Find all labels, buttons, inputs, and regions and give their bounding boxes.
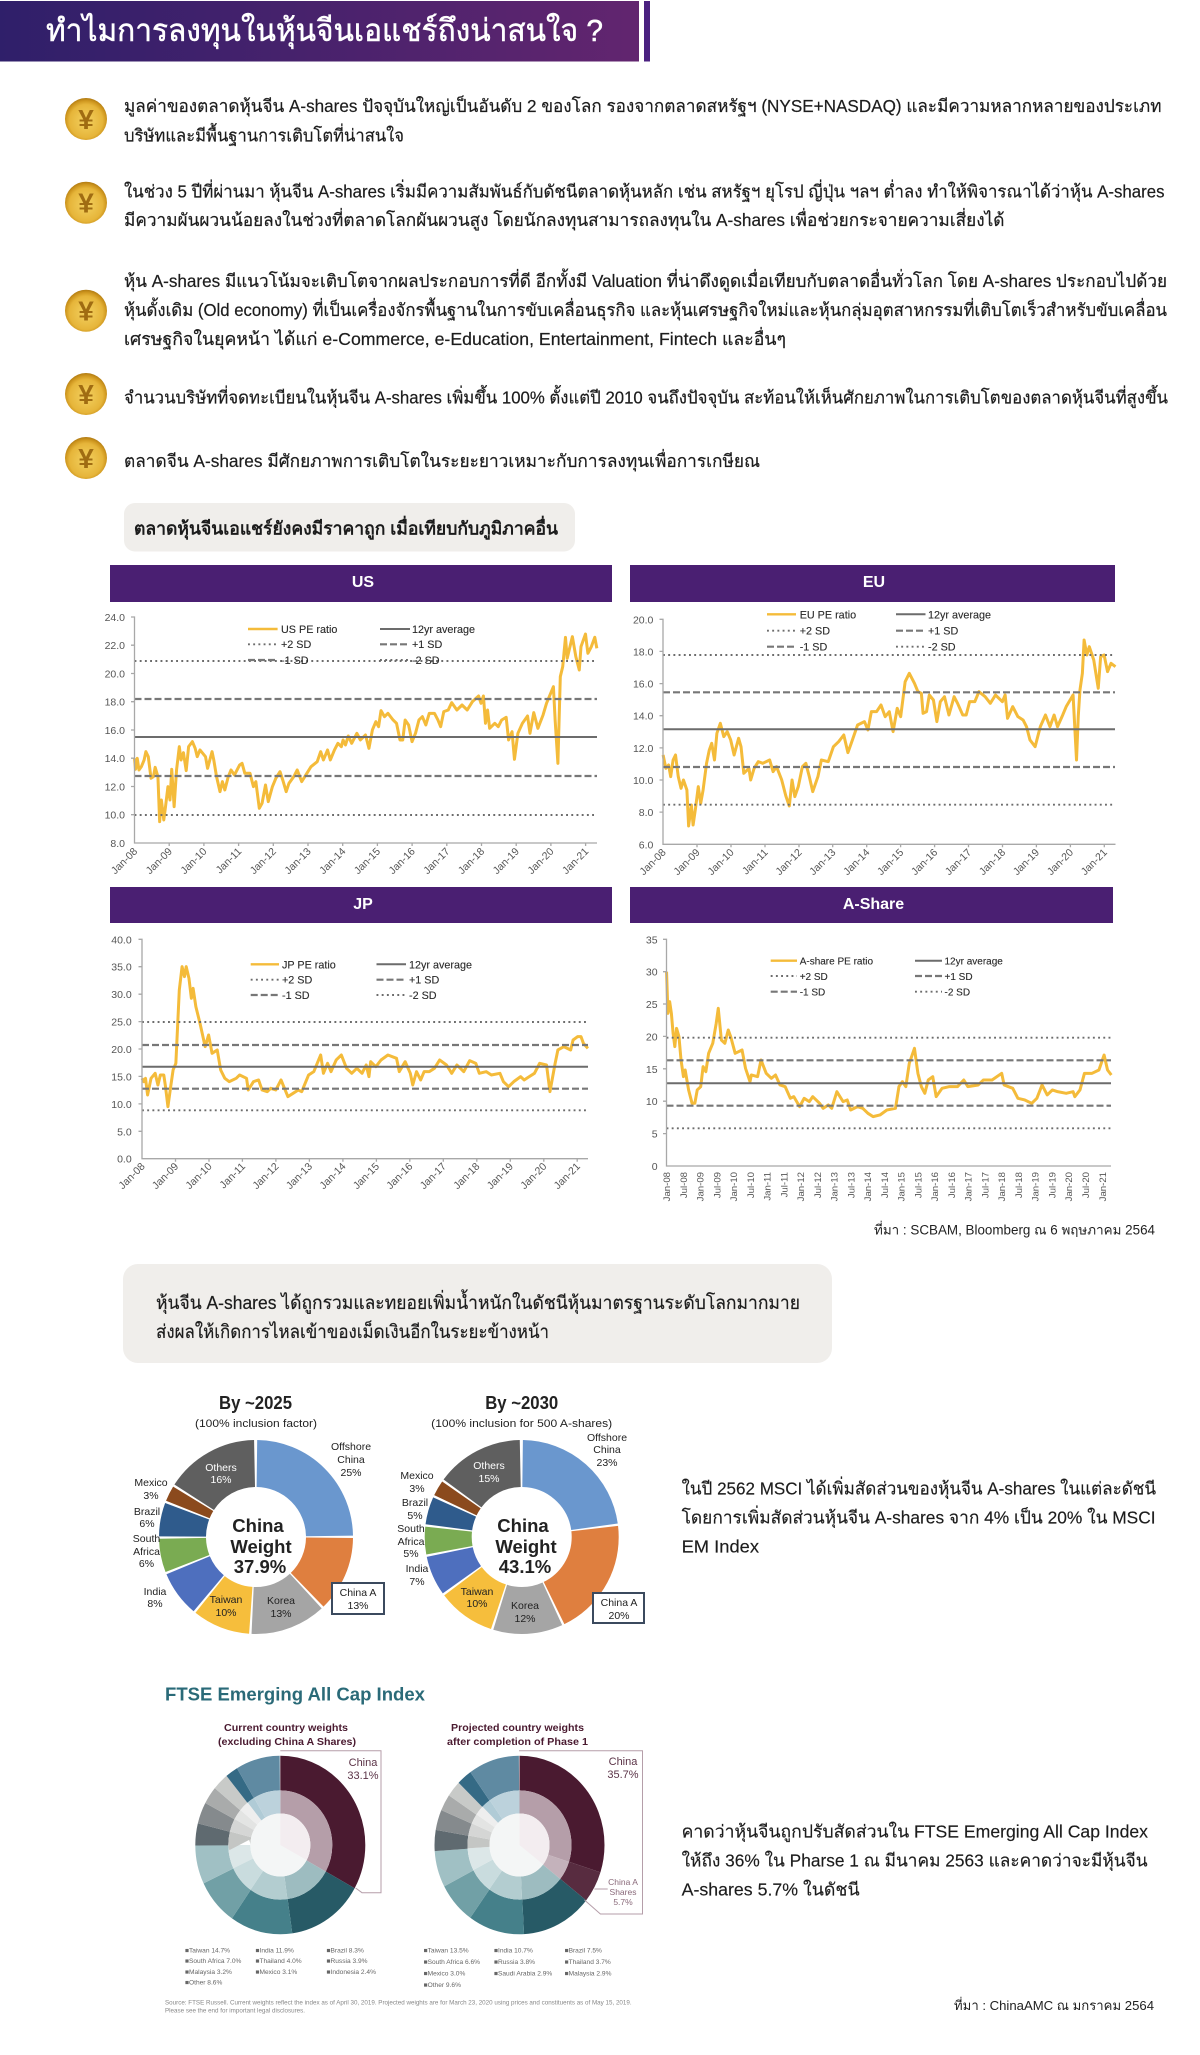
line chart: A-share PE ratio: Jan-21 (1098, 1172, 1109, 1201)
legend: US: -2 SD (412, 655, 440, 667)
legend: current weights: ■Malaysia 3.2% (185, 1969, 232, 1976)
China A label box: China A (601, 1597, 637, 1609)
slice labels: Offshore (331, 1441, 371, 1453)
text block: MSCI note: EM Index (682, 1536, 759, 1556)
slice labels: China (593, 1444, 621, 1456)
line chart: A-share PE ratio: Jul-16 (947, 1172, 958, 1198)
line chart: A-share PE ratio: Jul-20 (1081, 1172, 1092, 1198)
legend: US (248, 624, 475, 667)
slice labels: Africa (133, 1546, 160, 1558)
legend: EU: -2 SD (928, 642, 956, 654)
panel: US PE chart (105, 565, 612, 877)
legend: A-Share: +2 SD (800, 972, 828, 983)
legend: current weights (185, 1948, 376, 1986)
icon: yen coin 2: ¥ (78, 188, 94, 219)
line chart: EU PE ratio: Jan-10 (705, 847, 737, 878)
text block: FTSE note: ให้ถึง 36% ใน Pharse 1 ณ มีนาคม 2563 และคาดว่าจะมีหุ้นจีน (682, 1850, 1148, 1872)
line chart: A-share PE ratio: 25 (646, 999, 658, 1011)
line chart: EU PE ratio: Jan-17 (943, 847, 974, 878)
line chart: US PE ratio: 16.0 (105, 725, 125, 737)
line chart: JP PE ratio: Jan-20 (518, 1161, 550, 1192)
text block: FTSE note: A-shares 5.7% ในดัชนี (682, 1880, 860, 1900)
line chart: JP PE ratio: 0.0 (117, 1154, 132, 1166)
legend: projected weights: ■Brazil 7.5% (565, 1948, 602, 1954)
China A label box (332, 1583, 384, 1614)
line chart: US PE ratio: 24.0 (105, 612, 125, 624)
legend: JP: +1 SD (409, 975, 440, 987)
legend: EU: -1 SD (800, 642, 828, 654)
text block: MSCI note: ในปี 2562 MSCI ได้เพิ่มสัดส่วนของหุ้นจีน A-shares ในแต่ละดัชนี (682, 1476, 1156, 1500)
legend: current weights: ■Other 8.6% (185, 1980, 222, 1986)
line chart: US PE ratio: Jan-18 (456, 846, 487, 877)
title banner: ทำไมการลงทุนในหุ้นจีนเอแชร์ถึงน่าสนใจ ? (46, 13, 603, 50)
header: EU: EU (863, 574, 885, 591)
chart title: (excluding China A Shares) (218, 1736, 356, 1748)
centre label: 37.9% (234, 1556, 286, 1577)
legend: current weights: ■South Africa 7.0% (185, 1958, 242, 1965)
text block: FTSE note (682, 1822, 1148, 1900)
centre label: 43.1% (499, 1556, 551, 1577)
line chart: A-share PE ratio: 5 (652, 1129, 658, 1141)
legend: EU: +2 SD (800, 626, 830, 638)
slice labels: 23% (596, 1457, 618, 1469)
legend: projected weights: ■India 10.7% (494, 1948, 533, 1954)
centre label (495, 1515, 557, 1577)
China A label box (593, 1593, 644, 1623)
line chart: US PE ratio: Jan-10 (178, 846, 210, 877)
line chart: A-share PE ratio: Jan-16 (930, 1172, 941, 1201)
text block: bullet 5: ตลาดจีน A-shares มีศักยภาพการเติบโตในระยะยาวเหมาะกับการลงทุนเพื่อการเกษียณ (124, 449, 760, 472)
chart title: (100% inclusion factor) (195, 1418, 317, 1430)
line chart: EU PE ratio: Jan-08 (637, 847, 669, 878)
slice labels: South (397, 1523, 425, 1535)
line chart: A-share PE ratio: 20 (646, 1031, 658, 1043)
header: JP: JP (353, 896, 373, 913)
source note: FTSE Russell (165, 2000, 632, 2014)
chart title: after completion of Phase 1 (447, 1736, 588, 1748)
header: US (110, 565, 612, 602)
legend: projected weights: ■Saudi Arabia 2.9% (494, 1970, 552, 1978)
chart title: (100% inclusion for 500 A-shares) (431, 1418, 612, 1430)
legend: JP: -1 SD (282, 990, 310, 1002)
line chart: US PE ratio: Jan-19 (491, 846, 522, 877)
slice labels: 8% (147, 1598, 163, 1610)
icon: yen coin 2 (65, 182, 107, 224)
line chart: A-share PE ratio: Jul-19 (1048, 1172, 1058, 1198)
line chart: EU PE ratio: Jan-20 (1045, 847, 1076, 878)
chart title (431, 1393, 612, 1430)
icon: yen coin 1: ¥ (78, 104, 94, 135)
line chart: A-share PE ratio: Jan-08 (662, 1172, 673, 1201)
legend: projected weights: ■Mexico 3.0% (424, 1970, 465, 1978)
header: JP (110, 887, 612, 923)
source note: SCBAM: ที่มา : SCBAM, Bloomberg ณ 6 พฤษภาคม 2564 (874, 1220, 1155, 1238)
China A label box: China A (340, 1587, 376, 1599)
text block: bullet 1: บริษัทและมีพื้นฐานการเติบโตที่น่าสนใจ (124, 122, 404, 146)
heading: valuation callout: ตลาดหุ้นจีนเอแชร์ยังคงมีราคาถูก เมื่อเทียบกับภูมิภาคอื่น (134, 516, 559, 540)
legend: US: -1 SD (281, 655, 309, 667)
text block: bullet 1 (124, 95, 1162, 146)
centre label: China (497, 1515, 549, 1536)
legend: EU: EU PE ratio (800, 609, 856, 621)
slice labels: Africa (398, 1536, 425, 1548)
text block: bullet 2 (124, 180, 1165, 231)
slice labels: Korea (511, 1600, 539, 1612)
slice labels: 12% (514, 1613, 536, 1625)
legend: A-Share: -2 SD (944, 988, 970, 999)
callout: China bracket (280, 1751, 381, 1893)
line chart: JP PE ratio: Jan-13 (284, 1161, 315, 1192)
line chart: US PE ratio: Jan-09 (144, 846, 175, 877)
chart title: Projected country weights (451, 1722, 584, 1734)
text block: bullet 3 (124, 268, 1167, 350)
line chart: JP PE ratio: 30.0 (111, 989, 132, 1001)
text block: bullet 4: จำนวนบริษัทที่จดทะเบียนในหุ้นจีน A-shares เพิ่มขึ้น 100% ตั้งแต่ปี 2010 จนถึงปัจจุบัน สะท้อนให้เห็นศักยภาพในการเติบโตของตลาดหุ้นจีนที่สูงขึ้น (124, 384, 1168, 408)
legend: current weights: ■Indonesia 2.4% (326, 1969, 376, 1976)
panel: EU PE chart (630, 565, 1116, 878)
line chart: A-share PE ratio: Jul-14 (880, 1171, 891, 1198)
line chart: JP PE ratio: Jan-12 (250, 1161, 282, 1192)
centre label: Weight (495, 1536, 557, 1557)
legend: US: US PE ratio (281, 624, 337, 636)
line chart: JP PE ratio: 15.0 (111, 1071, 132, 1083)
header: A-Share: A-Share (843, 896, 904, 913)
line chart: A-share PE ratio: Jul-09 (712, 1172, 723, 1198)
header: US: US (352, 574, 374, 591)
heading: index inclusion callout (123, 1264, 832, 1363)
slice labels: 3% (143, 1490, 159, 1502)
legend: current weights: ■Russia 3.9% (326, 1958, 368, 1965)
icon: yen coin 5: ¥ (78, 443, 94, 474)
China A label box: 13% (347, 1600, 369, 1612)
line chart: EU PE ratio: Jan-14 (841, 847, 872, 878)
line chart: A-share PE ratio: Jul-08 (679, 1172, 690, 1198)
concentric rings (212, 1773, 349, 1917)
line chart: EU PE ratio: 20.0 (633, 614, 654, 626)
legend: current weights: ■India 11.9% (256, 1948, 294, 1954)
icon: yen coin 1 (65, 98, 107, 140)
donut rings (448, 1464, 595, 1610)
line chart: EU PE ratio (633, 609, 1116, 878)
centre label: China (232, 1515, 284, 1536)
text block: bullet 2: มีความผันผวนน้อยลงในช่วงที่ตลาดโลกผันผวนสูง โดยนักลงทุนสามารถลงทุนใน A-shares เพื่อช่วยกระจายความเสี่ยงได้ (124, 208, 1004, 231)
slice labels: India (406, 1563, 429, 1575)
slice labels (397, 1432, 627, 1625)
line chart: A-share PE ratio: Jan-15 (897, 1172, 908, 1201)
legend: JP (251, 959, 472, 1002)
line chart: EU PE ratio: Jan-15 (875, 847, 906, 878)
legend: JP: -2 SD (409, 990, 437, 1002)
icon: yen coin 5 (65, 437, 107, 479)
pie chart: projected FTSE weights (424, 1722, 642, 1989)
legend: current weights: ■Mexico 3.1% (256, 1969, 297, 1976)
line chart: JP PE ratio: 25.0 (111, 1017, 132, 1029)
line chart: A-share PE ratio: Jul-11 (779, 1172, 790, 1197)
callout: China bracket: 35.7% (607, 1769, 639, 1781)
line chart: JP PE ratio: Jan-10 (183, 1161, 215, 1192)
line chart: JP PE ratio: 40.0 (111, 934, 132, 946)
heading: index inclusion callout: หุ้นจีน A-shares ได้ถูกรวมและทยอยเพิ่มน้ำหนักในดัชนีหุ้นมาตรฐานระดับโลกมากมาย (156, 1289, 800, 1315)
legend: current weights: ■Brazil 8.3% (326, 1948, 364, 1954)
title banner (0, 1, 650, 62)
slice labels: Brazil (402, 1497, 428, 1509)
slice labels: Taiwan (461, 1586, 494, 1598)
slice labels: Others (205, 1462, 237, 1474)
legend: JP: +2 SD (282, 975, 313, 987)
callout: China bracket: China A (608, 1877, 638, 1887)
callout: China bracket: China (349, 1757, 378, 1769)
line chart: A-share PE ratio: Jan-09 (696, 1172, 706, 1201)
callout: China bracket: 5.7% (613, 1897, 633, 1907)
legend: A-Share: -1 SD (800, 988, 825, 999)
line chart: US PE ratio: Jan-11 (214, 846, 244, 876)
panel: A-Share PE chart (630, 887, 1113, 1201)
line chart: A-share PE ratio (646, 934, 1111, 1201)
slice labels: 25% (340, 1467, 362, 1479)
line chart: A-share PE ratio: Jul-10 (746, 1172, 757, 1198)
line chart: JP PE ratio: Jan-19 (485, 1161, 516, 1192)
line chart: JP PE ratio: 10.0 (111, 1099, 132, 1111)
legend: EU (767, 609, 991, 654)
line chart: A-share PE ratio: Jan-12 (796, 1172, 807, 1201)
icon: yen coin 3 (65, 290, 107, 332)
line chart: JP PE ratio: Jan-18 (451, 1161, 483, 1192)
callout: China bracket (519, 1751, 642, 1914)
panel: JP PE chart (110, 887, 612, 1192)
line chart: US PE ratio: 8.0 (110, 838, 125, 850)
slice labels: 10% (466, 1598, 488, 1610)
line chart: US PE ratio: 14.0 (105, 753, 125, 765)
legend: US: 12yr average (412, 624, 475, 636)
slice labels: India (144, 1586, 167, 1598)
line chart: A-share PE ratio: 35 (646, 934, 658, 946)
line chart: EU PE ratio: Jan-16 (909, 847, 940, 878)
centre label: Weight (230, 1536, 292, 1557)
line chart: EU PE ratio: 16.0 (633, 679, 654, 691)
line chart: EU PE ratio: 6.0 (639, 839, 654, 851)
slice labels: 7% (409, 1576, 425, 1588)
line chart: EU PE ratio: 18.0 (633, 646, 654, 658)
legend: A-Share: 12yr average (944, 957, 1003, 968)
line chart: US PE ratio: Jan-14 (317, 846, 348, 877)
header: A-Share (630, 887, 1113, 923)
line chart: A-share PE ratio: Jul-15 (913, 1172, 924, 1198)
line chart: JP PE ratio: Jan-17 (418, 1161, 449, 1192)
slice labels: Korea (267, 1595, 295, 1607)
slice labels: 3% (409, 1483, 425, 1495)
line chart: US PE ratio: Jan-12 (248, 846, 279, 877)
line chart: A-share PE ratio: Jan-20 (1064, 1172, 1075, 1201)
line chart: US PE ratio: Jan-13 (282, 846, 314, 877)
line chart: US PE ratio: 18.0 (105, 697, 125, 709)
text block: MSCI note: โดยการเพิ่มสัดส่วนหุ้นจีน A-shares จาก 4% เป็น 20% ใน MSCI (682, 1506, 1156, 1528)
line chart: EU PE ratio: Jan-13 (807, 847, 838, 878)
line chart: JP PE ratio: Jan-15 (351, 1161, 382, 1192)
slice labels: Mexico (134, 1477, 168, 1489)
donut chart: by 2025 (133, 1393, 384, 1620)
source note: FTSE Russell: Please see the end for important legal disclosures. (165, 2008, 305, 2014)
chart title (195, 1393, 317, 1430)
icon: yen coin 4: ¥ (78, 379, 94, 410)
line chart: US PE ratio: Jan-08 (109, 846, 140, 877)
line chart: EU PE ratio: 12.0 (633, 743, 654, 755)
icon: yen coin 3: ¥ (78, 296, 94, 327)
legend: US: +2 SD (281, 639, 312, 651)
line chart: US PE ratio: 12.0 (105, 782, 125, 794)
line chart: US PE ratio: Jan-20 (525, 846, 557, 877)
source note: FTSE Russell: Source: FTSE Russell. Current weights reflect the index as of April 30, 2019. Projected weights are for March 23, 2020 using prices and constituents as of May 15, 2019. (165, 2000, 632, 2006)
bullet list: reasons (65, 95, 1168, 479)
slice labels: 13% (270, 1608, 292, 1620)
line chart: A-share PE ratio: Jan-14 (863, 1171, 874, 1201)
line chart: EU PE ratio: Jan-09 (671, 847, 703, 878)
donut rings (182, 1464, 330, 1610)
line chart: JP PE ratio: 20.0 (111, 1044, 132, 1056)
slice labels (133, 1441, 371, 1620)
legend: A-Share: A-share PE ratio (800, 957, 874, 968)
slice labels: Mexico (400, 1470, 434, 1482)
concentric rings (451, 1773, 588, 1917)
slice labels: Brazil (134, 1506, 160, 1518)
callout: China bracket: China (609, 1756, 638, 1768)
chart title: By ~2030 (485, 1393, 558, 1413)
slice labels: Others (473, 1460, 505, 1472)
line chart: JP PE ratio: Jan-08 (116, 1161, 148, 1192)
slice labels: 6% (139, 1558, 154, 1570)
line chart: A-share PE ratio: Jan-19 (1031, 1172, 1042, 1201)
line chart: A-share PE ratio: 10 (646, 1096, 658, 1108)
China A label box: 20% (608, 1610, 630, 1622)
line chart: EU PE ratio: 14.0 (633, 711, 654, 723)
legend: EU: 12yr average (928, 609, 991, 621)
legend: projected weights: ■South Africa 6.6% (424, 1959, 480, 1966)
line chart: JP PE ratio: Jan-21 (552, 1161, 583, 1192)
line chart: US PE ratio: 22.0 (105, 640, 125, 652)
line chart: EU PE ratio: 10.0 (633, 775, 654, 787)
source note: ChinaAMC: ที่มา : ChinaAMC ณ มกราคม 2564 (954, 1997, 1154, 2013)
line chart: A-share PE ratio: Jan-10 (729, 1172, 740, 1201)
line chart: US PE ratio: Jan-17 (421, 846, 453, 877)
line chart: US PE ratio: 20.0 (105, 668, 125, 680)
line chart: US PE ratio (105, 612, 597, 877)
line chart: JP PE ratio: 5.0 (117, 1126, 132, 1138)
slice labels: South (133, 1533, 160, 1545)
slice labels: 5% (403, 1548, 419, 1560)
donut chart: by 2030 (397, 1393, 644, 1625)
legend: JP: 12yr average (409, 959, 472, 971)
slice labels: 16% (210, 1474, 232, 1486)
legend: projected weights (424, 1948, 612, 1989)
line chart: JP PE ratio: Jan-09 (150, 1161, 181, 1192)
chart title: By ~2025 (219, 1393, 292, 1413)
line chart: A-share PE ratio: Jul-12 (813, 1172, 824, 1198)
line chart: A-share PE ratio: 15 (646, 1064, 658, 1076)
text block: FTSE note: คาดว่าหุ้นจีนถูกปรับสัดส่วนใน FTSE Emerging All Cap Index (682, 1822, 1148, 1842)
callout: China bracket: 33.1% (347, 1770, 379, 1782)
text block: bullet 3: เศรษฐกิจในยุคหน้า ได้แก่ e-Commerce, e-Education, Entertainment, Fintech และอื่นๆ (124, 327, 786, 350)
line chart: A-share PE ratio: Jul-18 (1014, 1172, 1025, 1198)
line chart: JP PE ratio: Jan-11 (217, 1161, 248, 1191)
chart title (218, 1722, 356, 1748)
line chart: A-share PE ratio: Jan-11 (763, 1172, 774, 1201)
line chart: A-share PE ratio: 0 (652, 1161, 658, 1173)
line chart: A-share PE ratio: 30 (646, 967, 658, 979)
legend: EU: +1 SD (928, 626, 959, 638)
legend: projected weights: ■Malaysia 2.9% (565, 1970, 612, 1978)
legend: projected weights: ■Other 9.6% (424, 1982, 461, 1989)
chart title (447, 1722, 588, 1748)
line chart: US PE ratio: Jan-16 (387, 846, 418, 877)
heading: valuation callout (124, 503, 575, 552)
line chart: EU PE ratio: Jan-19 (1011, 847, 1042, 878)
line chart: JP PE ratio (111, 934, 588, 1192)
centre label (230, 1515, 292, 1577)
slice labels: China (337, 1454, 365, 1466)
heading: FTSE index title: FTSE Emerging All Cap Index (165, 1684, 425, 1704)
line chart: US PE ratio: 10.0 (105, 810, 125, 822)
line chart: JP PE ratio: Jan-14 (317, 1161, 349, 1192)
line chart: A-share PE ratio: Jan-17 (964, 1172, 975, 1201)
legend: current weights: ■Thailand 4.0% (256, 1958, 302, 1965)
line chart: EU PE ratio: Jan-12 (773, 847, 805, 878)
legend: JP: JP PE ratio (282, 959, 336, 971)
line chart: A-share PE ratio: Jan-13 (830, 1172, 841, 1201)
header: EU (630, 565, 1115, 602)
legend: current weights: ■Taiwan 14.7% (185, 1948, 230, 1954)
slice labels: 15% (478, 1473, 500, 1485)
line chart: EU PE ratio: Jan-11 (740, 847, 771, 877)
line chart: EU PE ratio: Jan-18 (977, 847, 1008, 878)
text block: bullet 3: หุ้น A-shares มีแนวโน้มจะเติบโตจากผลประกอบการที่ดี อีกทั้งมี Valuation ที่น่าดึงดูดเมื่อเทียบกับตลาดอื่นทั่วโลก โดย A-shares ประกอบไปด้วย (124, 268, 1167, 292)
legend: projected weights: ■Russia 3.8% (494, 1959, 535, 1966)
line chart: A-share PE ratio: Jul-17 (980, 1172, 991, 1198)
slice labels: 5% (407, 1510, 423, 1522)
line chart: JP PE ratio: Jan-16 (384, 1161, 416, 1192)
callout: China bracket: Shares (610, 1887, 636, 1897)
line chart: EU PE ratio: Jan-21 (1079, 847, 1110, 878)
slice labels: Taiwan (210, 1594, 243, 1606)
icon: yen coin 4 (65, 373, 107, 415)
legend: projected weights: ■Thailand 3.7% (565, 1959, 611, 1966)
legend: A-Share: +1 SD (944, 972, 973, 983)
line chart: US PE ratio: Jan-15 (352, 846, 383, 877)
legend: US: +1 SD (412, 639, 443, 651)
text block: bullet 1: มูลค่าของตลาดหุ้นจีน A-shares ปัจจุบันใหญ่เป็นอันดับ 2 ของโลก รองจากตลาดสหรัฐฯ (NYSE+NASDAQ) และมีความหลากหลายของประเภท (124, 95, 1162, 117)
text block: bullet 2: ในช่วง 5 ปีที่ผ่านมา หุ้นจีน A-shares เริ่มมีความสัมพันธ์กับดัชนีตลาดหุ้นหลัก เช่น สหรัฐฯ ยุโรป ญี่ปุ่น ฯลฯ ต่ำลง ทำให้พิจารณาได้ว่าหุ้น A-shares (124, 180, 1165, 202)
line chart: EU PE ratio: 8.0 (639, 807, 654, 819)
line chart: A-share PE ratio: Jan-18 (997, 1172, 1008, 1201)
heading: index inclusion callout: ส่งผลให้เกิดการไหลเข้าของเม็ดเงินอีกในระยะข้างหน้า (156, 1319, 549, 1342)
slice labels: 6% (139, 1518, 155, 1530)
line chart: US PE ratio: Jan-21 (560, 846, 591, 877)
slice labels: 10% (215, 1607, 237, 1619)
legend: A-Share (771, 957, 1003, 999)
slice labels: Offshore (587, 1432, 627, 1444)
legend: projected weights: ■Taiwan 13.5% (424, 1948, 469, 1954)
line chart: A-share PE ratio: Jul-13 (846, 1172, 857, 1198)
line chart: JP PE ratio: 35.0 (111, 962, 132, 974)
text block: MSCI note (682, 1476, 1156, 1556)
text block: bullet 3: หุ้นดั้งเดิม (Old economy) ที่เป็นเครื่องจักรพื้นฐานในการขับเคลื่อนธุรกิจ และหุ้นเศรษฐกิจใหม่และหุ้นกลุ่มอุตสาหกรรมที่เติบโตเร็วสำหรับขับเคลื่อน (124, 297, 1167, 321)
pie chart: current FTSE weights (185, 1722, 381, 1986)
chart title: Current country weights (224, 1722, 348, 1734)
